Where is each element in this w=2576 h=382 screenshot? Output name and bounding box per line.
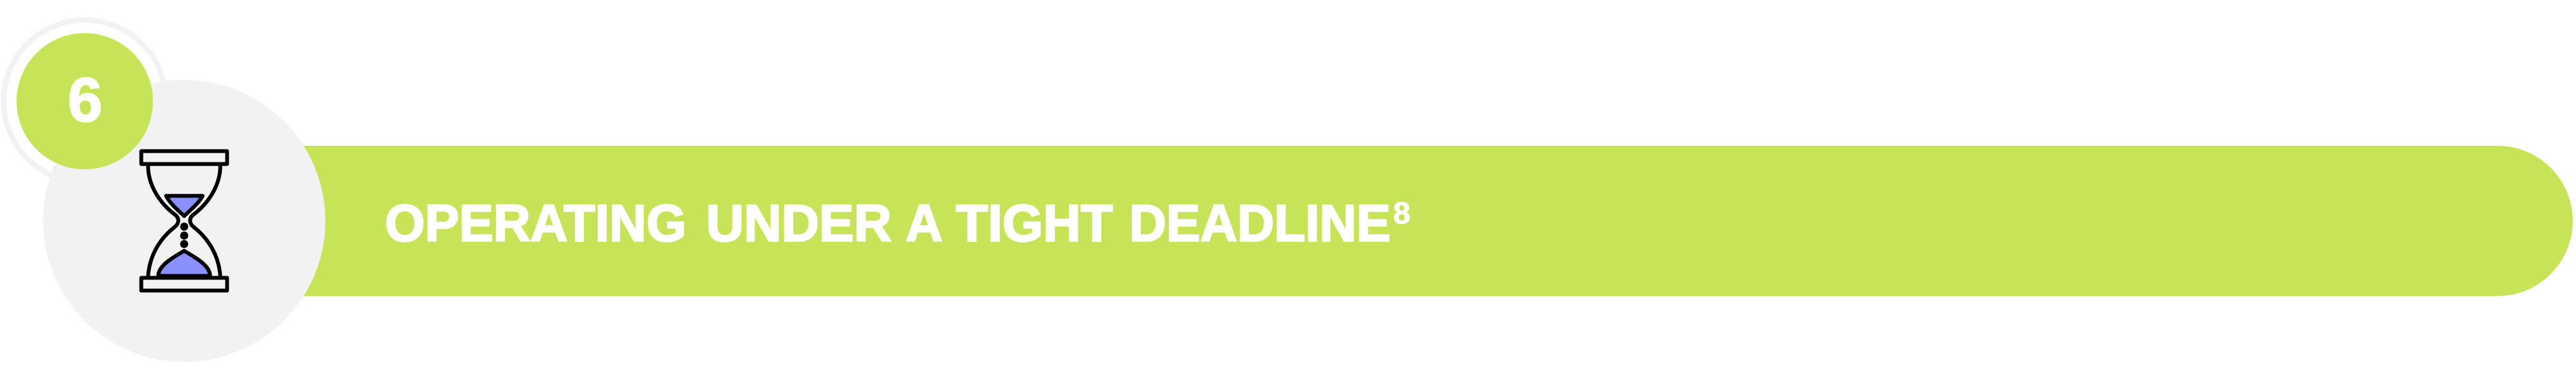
title: OPERATING xyxy=(385,195,686,252)
hourglass glass body xyxy=(148,166,221,276)
icon backdrop circle xyxy=(43,80,325,362)
number 6: 6 xyxy=(68,65,103,135)
bottom cap xyxy=(141,278,227,290)
number badge xyxy=(17,33,153,169)
number ring outline xyxy=(4,20,166,182)
title: 8 xyxy=(1393,197,1410,230)
title: TIGHT xyxy=(956,195,1113,252)
title: DEADLINE xyxy=(1129,195,1391,252)
title: UNDER xyxy=(706,195,892,252)
top sand xyxy=(166,196,203,216)
top cap xyxy=(141,151,227,164)
bottom sand xyxy=(158,251,210,276)
title: A xyxy=(906,195,942,252)
heading bar xyxy=(184,146,2573,296)
icon: hourglass xyxy=(141,151,227,290)
falling sand dots xyxy=(180,223,188,248)
